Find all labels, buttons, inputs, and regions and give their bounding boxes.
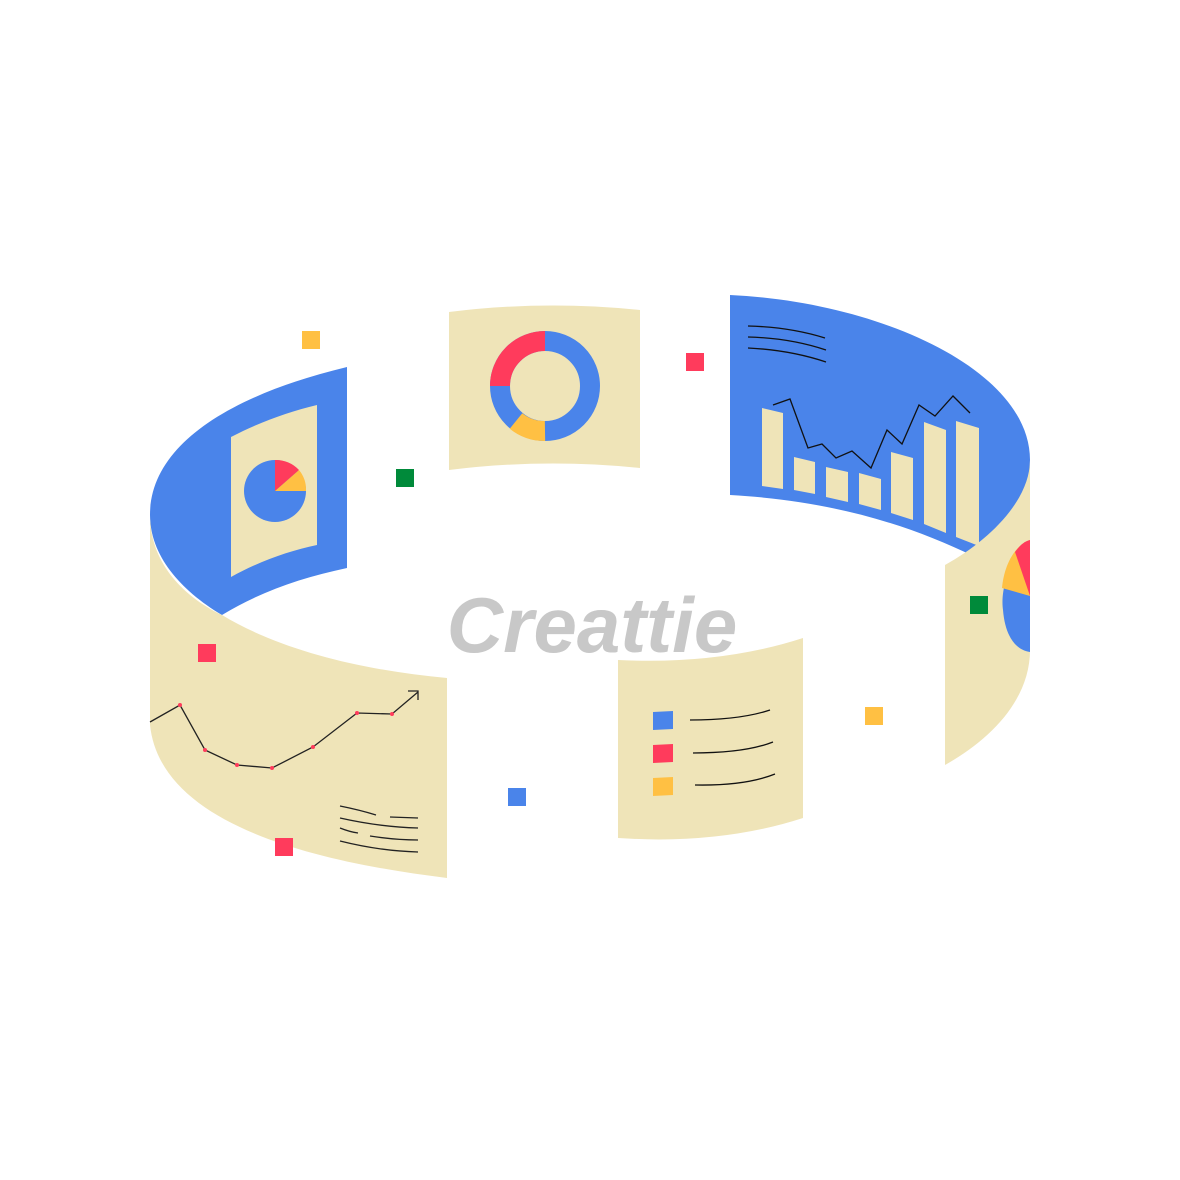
panel: right beige band bbox=[945, 460, 1030, 765]
panel: bottom legend card bbox=[618, 638, 803, 839]
donut chart bbox=[500, 341, 590, 431]
partial pie bbox=[1002, 540, 1030, 652]
legend items bbox=[653, 710, 775, 796]
bars bbox=[762, 408, 979, 546]
pie chart bbox=[244, 460, 306, 522]
line bbox=[773, 396, 970, 468]
panel: left beige band with line chart bbox=[150, 515, 447, 878]
inner pie card bbox=[231, 405, 317, 577]
confetti squares bbox=[198, 331, 988, 856]
panel: left blue screen bbox=[150, 367, 347, 615]
panel: top donut card bbox=[449, 305, 640, 470]
line chart bbox=[150, 691, 418, 768]
watermark text: Creattie bbox=[447, 581, 737, 669]
text lines bbox=[748, 326, 826, 362]
panel: right blue bar chart screen bbox=[730, 295, 1030, 557]
text lines bbox=[340, 806, 418, 852]
